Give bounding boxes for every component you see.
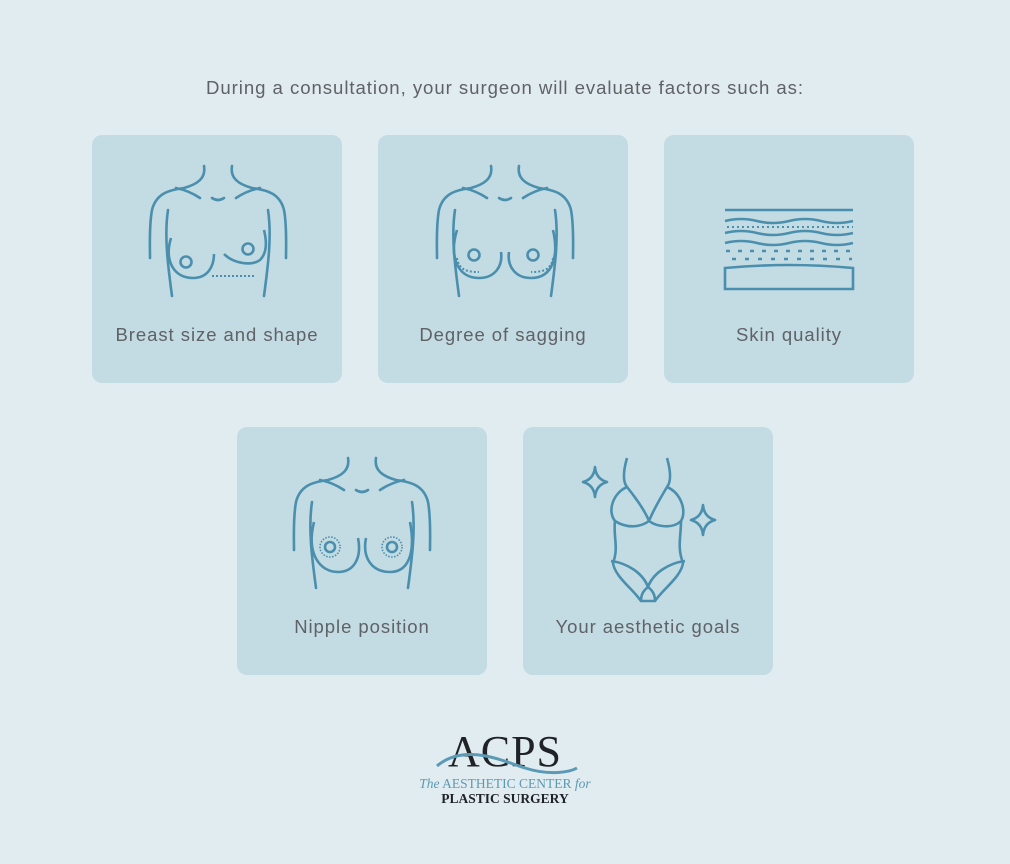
logo: The AESTHETIC CENTER for [419,776,591,791]
icon: torso sagging [436,164,574,298]
logo: ACPS [448,727,562,776]
panel: breast size and shape [92,135,342,383]
label: Breast size and shape [115,324,318,345]
icon: torso nipples [292,456,432,590]
icon: swimsuit with sparkles [582,458,716,602]
panel: degree of sagging [378,135,628,383]
icon: skin layers [724,208,854,290]
label: Your aesthetic goals [556,616,740,637]
panel: nipple position [237,427,487,675]
icon: torso size [148,164,288,298]
label: Degree of sagging [419,324,587,345]
logo [419,727,591,806]
panel: aesthetic goals [523,427,773,675]
label: Nipple position [294,616,430,637]
logo: PLASTIC SURGERY [441,791,569,806]
label: Skin quality [736,324,842,345]
panel: skin quality [664,135,914,383]
title: During a consultation, your surgeon will evaluate factors such as: [206,77,804,98]
